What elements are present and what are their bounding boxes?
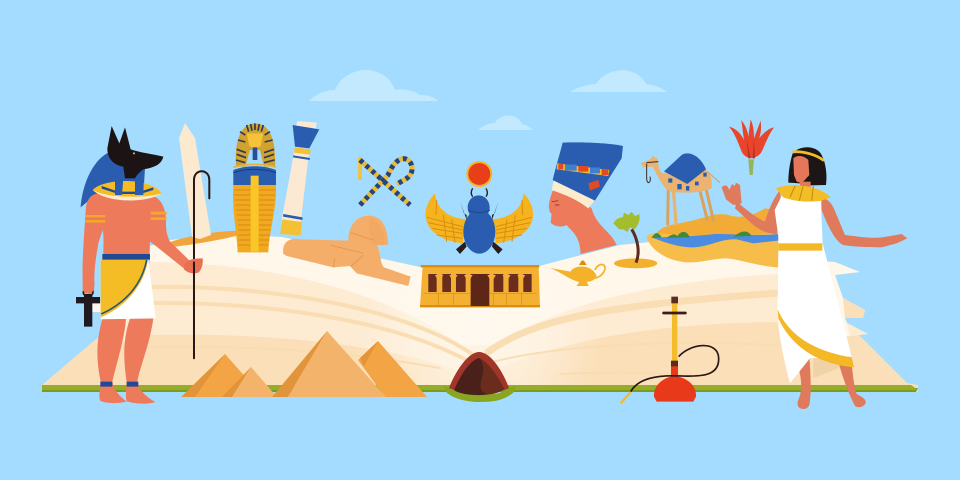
cloud left [309,70,438,101]
hair [788,147,826,185]
jackal head [107,126,163,178]
book spine [444,352,516,402]
dress [775,196,852,383]
cloud right [570,70,667,92]
Anubis figure [76,126,209,404]
papyrus column [280,121,319,235]
open book [42,236,918,392]
winged scarab [426,161,533,254]
hand on staff [184,258,203,273]
cloud small [478,116,533,130]
neck [800,182,811,188]
palm tree [613,212,657,268]
oasis island [647,208,778,267]
pyramid group [181,331,427,397]
lotus flower [729,119,774,175]
headdress [81,151,145,207]
sphinx [283,216,411,286]
woman in white dress [722,147,907,409]
camel [641,153,720,224]
body [83,194,193,293]
legs and feet [97,318,127,403]
sarcophagus [233,123,276,252]
collar [776,185,831,202]
obelisk [179,123,211,239]
skirt [101,259,156,319]
temple [420,265,540,307]
crook and flail [358,157,412,205]
legs and feet [798,357,811,409]
Nefertiti bust [549,142,623,254]
genie lamp [550,261,605,286]
dress shadow [813,357,847,378]
arms [735,190,782,234]
ankh [76,294,100,327]
orange sand mound [170,231,240,247]
hookah [621,297,719,403]
face [793,156,809,183]
collar [93,181,162,199]
staff [194,171,209,358]
